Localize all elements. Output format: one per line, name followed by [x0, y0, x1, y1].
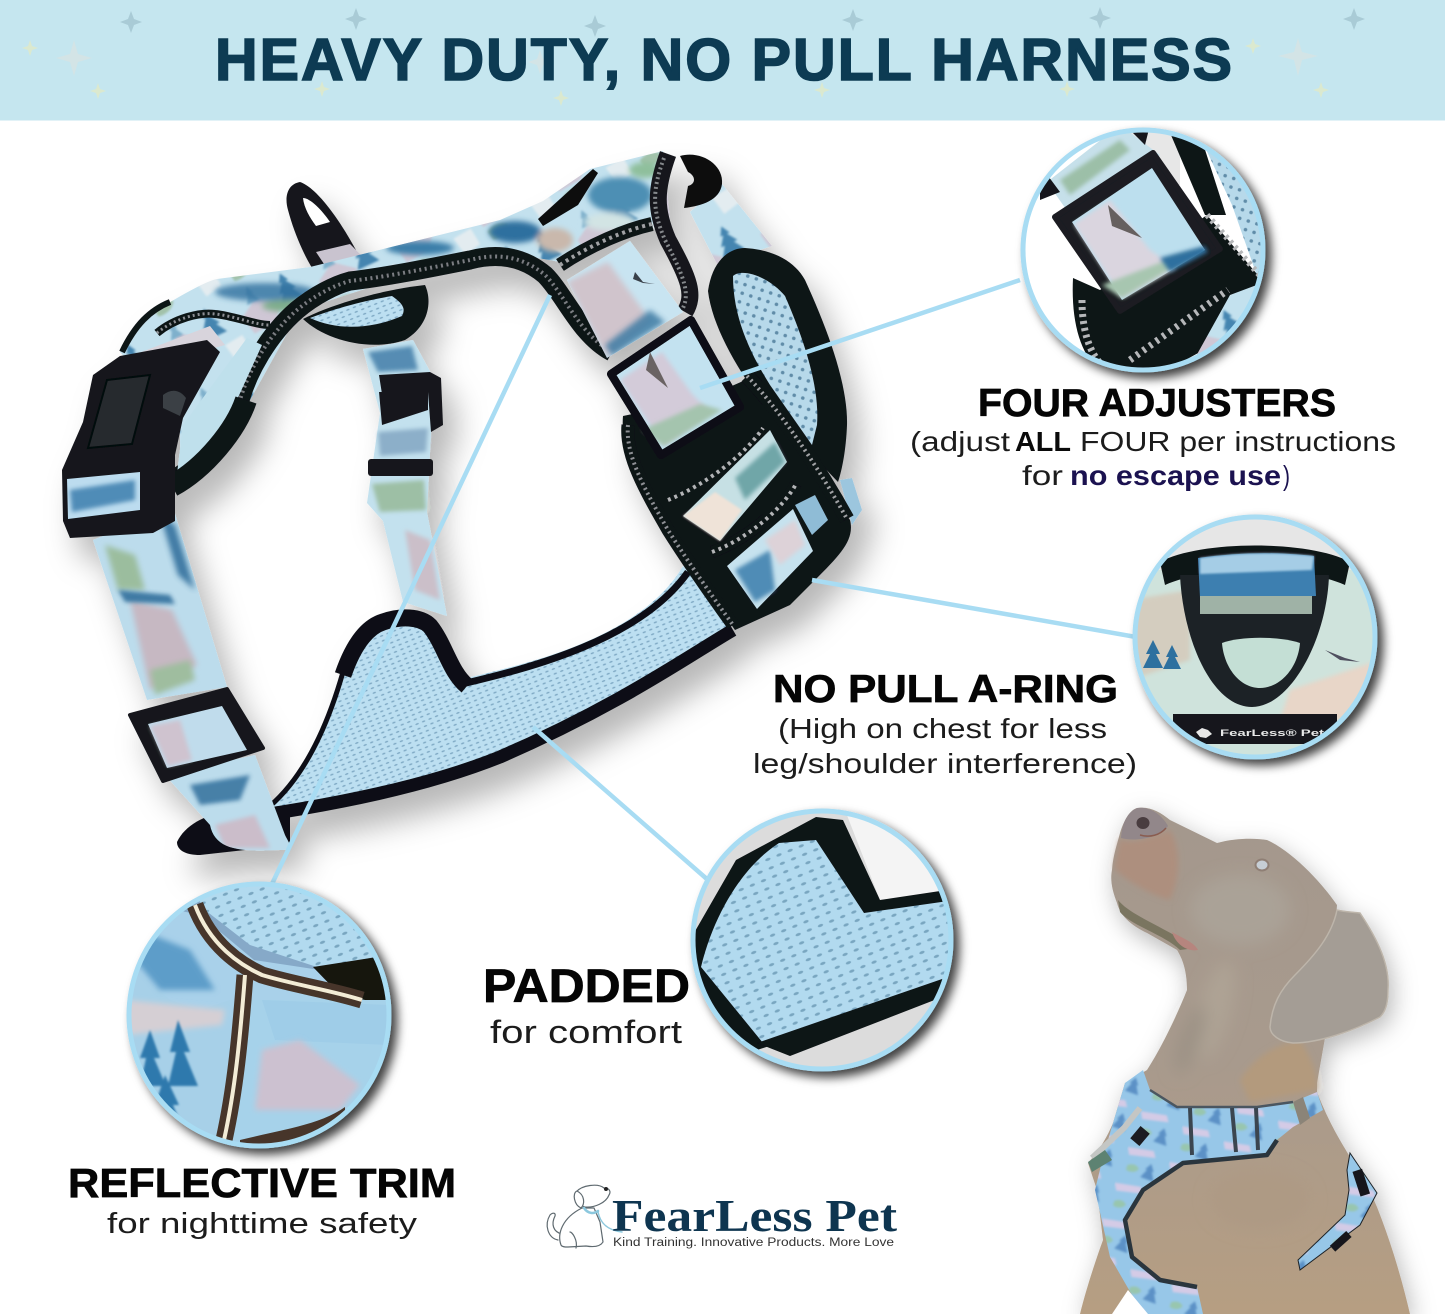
callout text: four adjusters [910, 382, 1396, 491]
dog body [1080, 808, 1410, 1314]
rear bands [560, 224, 652, 265]
top binding [172, 256, 612, 480]
callout text: four adjusters: ) [1283, 460, 1290, 491]
callout text: padded: for comfort [490, 1014, 682, 1050]
dog photo illustration [1080, 808, 1410, 1314]
icon: sitting puppy [547, 1185, 622, 1248]
neck fold [1240, 1040, 1317, 1102]
gap beside front leg [1112, 1290, 1148, 1314]
tagline: Kind Training. Innovative Products. More Love [613, 1237, 894, 1249]
callout text: four adjusters: no escape use [1070, 460, 1281, 491]
leash clip [1092, 1108, 1140, 1158]
callout circle: reflective trim [125, 880, 395, 1150]
callout text: padded [483, 959, 690, 1050]
painted scenery on panel [215, 162, 661, 312]
callout text: reflective trim: REFLECTIVE TRIM [68, 1160, 456, 1206]
chest mesh plate [177, 566, 733, 855]
callout text: padded: PADDED [483, 959, 690, 1012]
top back panel [120, 151, 690, 480]
eye [1256, 860, 1268, 870]
callout circle: padded [690, 805, 960, 1075]
callout text: no pull a-ring: NO PULL A-RING [773, 668, 1118, 711]
callout text: four adjusters: FOUR ADJUSTERS [978, 382, 1336, 425]
far side strap [1298, 1153, 1377, 1270]
callout text: reflective trim [68, 1160, 456, 1240]
mouth [1118, 900, 1188, 950]
pointer lines [272, 280, 1136, 884]
callout text: no pull a-ring [753, 668, 1137, 779]
callout text: four adjusters: FOUR per instructions [1080, 426, 1396, 457]
middle strap [363, 340, 447, 616]
callout text: four adjusters: for [1022, 460, 1063, 491]
callout text: four adjusters: (adjust [910, 426, 1010, 457]
callout circle: no pull a-ring [1130, 510, 1380, 760]
grab ring [286, 182, 362, 282]
callout text: four adjusters: ALL [1015, 426, 1071, 457]
wordmark: FearLess Pet [612, 1190, 898, 1241]
left strap [93, 507, 290, 851]
side mesh pad [708, 248, 847, 482]
muzzle [1114, 830, 1178, 900]
handle loop [680, 155, 722, 208]
soft fur shading [1182, 882, 1282, 1057]
callout text: no pull a-ring: leg/shoulder interference) [753, 748, 1137, 779]
callout circle: no pull a-ring: FearLess® Pet [1220, 728, 1325, 739]
right strap and adjuster assembly [567, 241, 862, 630]
label tag [538, 169, 598, 226]
callout text: reflective trim: for nighttime safety [107, 1208, 418, 1240]
side release buckle [62, 326, 262, 538]
header banner [0, 0, 1445, 120]
small under pad [303, 285, 428, 345]
nose [1121, 808, 1168, 840]
ear [1270, 910, 1388, 1043]
title: HEAVY DUTY, NO PULL HARNESS [215, 27, 1232, 93]
brand logo [547, 1185, 898, 1249]
harness illustration [62, 151, 862, 855]
callout circle: four adjusters [1023, 125, 1270, 385]
back strap behind mesh pad [690, 184, 772, 264]
dog harness [1088, 1070, 1377, 1314]
callout text: no pull a-ring: (High on chest for less [778, 713, 1107, 744]
